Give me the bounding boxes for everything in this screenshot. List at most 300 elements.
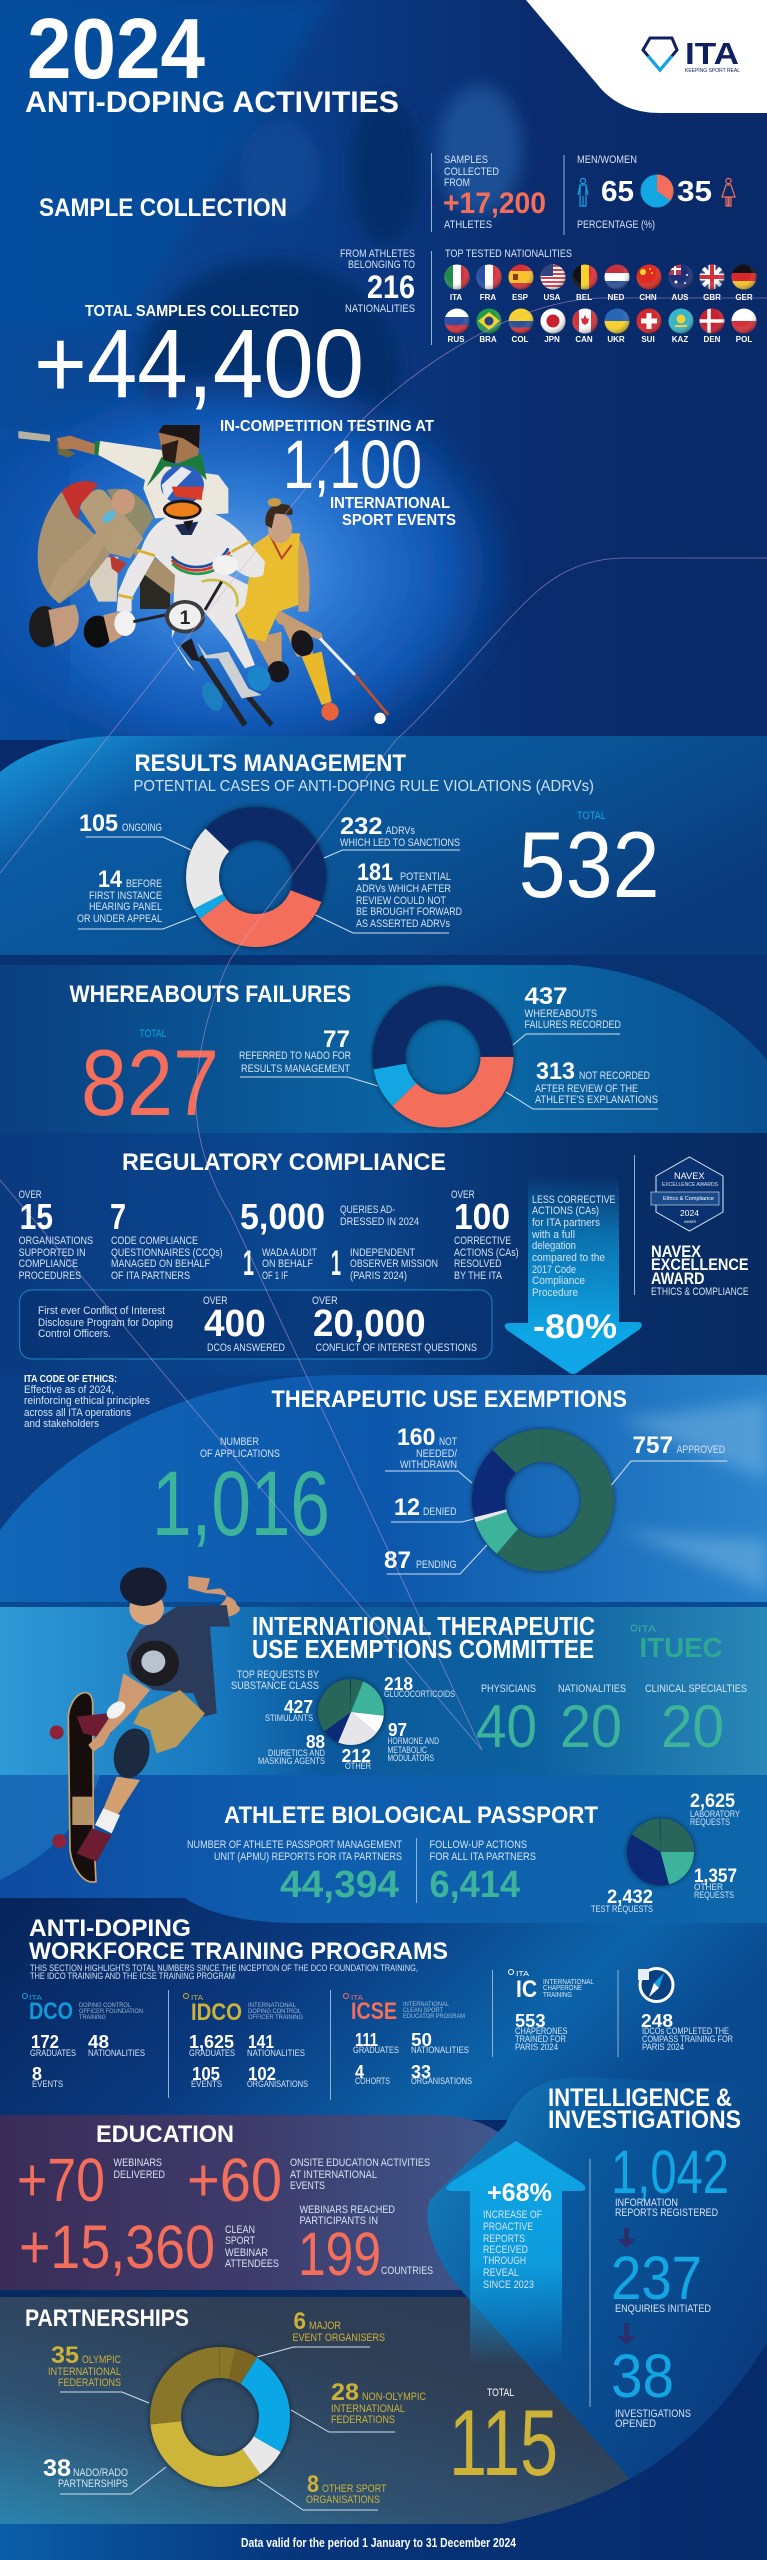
callout: 757 approved: 757 [632, 1432, 673, 1459]
stat: athletes: +17,200 [443, 187, 546, 220]
panel: results management [0, 736, 767, 965]
icon: NAVEX badge: EXCELLENCE AWARDS [662, 1182, 719, 1188]
callout: 181 potential: 181 [357, 859, 393, 886]
stat: men and women: MEN/WOMEN [577, 154, 637, 166]
stat: over 100 corrective actions: RESOLVED [454, 1258, 502, 1270]
panel: conflict of interest disclosure: CONFLICT OF INTEREST QUESTIONS [316, 1342, 477, 1354]
stat: 1,042 information reports [611, 2138, 729, 2219]
callout: 35 olympic federations [48, 2342, 149, 2403]
flags: top tested nationalities: TOP TESTED NATIONALITIES [445, 248, 572, 260]
text: top requests heading [231, 1669, 320, 1692]
program: compass training: COMPASS TRAINING FOR [642, 2034, 733, 2044]
stat: 1,042 information reports: REPORTS REGISTERED [615, 2207, 718, 2219]
callout: 160 not needed [385, 1424, 472, 1483]
program: IDCO: DOPING CONTROL [248, 2008, 301, 2015]
flags: top tested nationalities: USA [544, 293, 561, 302]
flags: top tested nationalities: FRA [480, 293, 496, 302]
icon: NAVEX badge: 2024 [680, 1209, 700, 1218]
callout: 181 potential [316, 859, 462, 933]
flags: top tested nationalities: NED [608, 293, 625, 302]
stat: APMU reports: NUMBER OF ATHLETE PASSPORT MANAGEMENT [187, 1839, 402, 1851]
heading: international therapeutic use exemptions committee: USE EXEMPTIONS COMMITTEE [252, 1634, 594, 1664]
callout: 181 potential: BE BROUGHT FORWARD [356, 906, 462, 918]
stat: 38 investigations: INVESTIGATIONS [615, 2408, 691, 2420]
stat: nationalities: 216 [367, 269, 415, 305]
logo: ITA: KEEPING SPORT REAL [685, 68, 740, 74]
panel: athlete biological passport [0, 1775, 767, 1930]
stat: in-competition events: SPORT EVENTS [342, 512, 456, 529]
labels: substance classes: STIMULANTS [265, 1713, 313, 1723]
athlete: BMX rider: 1 [180, 608, 191, 629]
stat: 38 investigations: OPENED [615, 2418, 656, 2430]
program: DCO [22, 1994, 145, 2089]
heading: international therapeutic use exemptions committee: INTERNATIONAL THERAPEUTIC [252, 1611, 595, 1641]
program: ICSE: ITA [351, 1995, 363, 2002]
callout: 160 not needed: NEEDED/ [416, 1448, 458, 1460]
callout: 181 potential: AS ASSERTED ADRVs [356, 918, 450, 930]
stat: observer mission: 1 [331, 1244, 341, 1283]
flags: top tested nationalities: GER [735, 293, 753, 302]
heading: workforce training: WORKFORCE TRAINING PROGRAMS [29, 1938, 448, 1965]
flags: top tested nationalities: JPN [544, 335, 560, 344]
stat: over 100 corrective actions: BY THE ITA [454, 1270, 503, 1282]
arrow: plus 68 percent: INCREASE OF [483, 2209, 542, 2221]
callout: 6 major event organisers: EVENT ORGANISERS [292, 2332, 385, 2344]
callout: 232 ADRVs [324, 813, 460, 858]
flags: top tested nationalities: RUS [448, 335, 465, 344]
program: ICSE: CLEAN SPORT [403, 2007, 443, 2014]
callout: 160 not needed: 160 [397, 1424, 435, 1451]
program: IC chaperone: PARIS 2024 [515, 2042, 558, 2052]
callout: 181 potential: REVIEW COULD NOT [356, 895, 446, 907]
stat: +15,360 attendees: CLEAN [225, 2224, 255, 2236]
stat: +15,360 attendees: SPORT [225, 2235, 255, 2247]
stat: 38 investigations: 38 [611, 2342, 674, 2410]
program: DCO: NATIONALITIES [88, 2048, 145, 2058]
stat: men and women: PERCENTAGE (%) [577, 219, 655, 231]
heading: workforce training: THE IDCO TRAINING AND THE ICSE TRAINING PROGRAM [30, 1971, 235, 1981]
callout: 77 referred [239, 1026, 378, 1086]
stat: 7 questionnaires: 7 [110, 1196, 126, 1237]
callout: 35 olympic federations: 35 [51, 2342, 79, 2369]
stat: over 100 corrective actions: ACTIONS (CAs) [454, 1247, 519, 1259]
stat: APMU reports: 44,394 [280, 1864, 399, 1906]
stat: 1,016 applications: OF APPLICATIONS [200, 1448, 280, 1460]
total: 827: TOTAL [139, 1028, 166, 1040]
logo: ITUEC: ITUEC [640, 1632, 722, 1663]
arrow: minus 80 percent: LESS CORRECTIVE [532, 1194, 616, 1206]
stat: nationalities: 20 [560, 1693, 622, 1760]
callout: 105 ongoing: ONGOING [122, 822, 162, 834]
labels: follow-up pie: REQUESTS [690, 1817, 730, 1827]
callout: 757 approved: APPROVED [677, 1444, 725, 1456]
arrow: minus 80 percent: for ITA partners [532, 1217, 600, 1229]
stat: over 15: 15 [20, 1196, 53, 1237]
icon: compass [638, 1968, 673, 2002]
arrow: minus 80 percent [505, 1175, 642, 1374]
heading: partnerships: PARTNERSHIPS [25, 2305, 189, 2332]
program: IC chaperone: TRAINED FOR [515, 2034, 566, 2044]
callout: 77 referred: RESULTS MANAGEMENT [241, 1063, 350, 1075]
logo: ITUEC: ITA [638, 1624, 656, 1634]
chart: substance class pie [334, 1696, 368, 1728]
labels: substance classes: GLUCOCORTICOIDS [384, 1689, 455, 1699]
callout: 14 before first instance [77, 866, 196, 929]
white logo corner [526, 0, 767, 113]
stat: 7 questionnaires: CODE COMPLIANCE [111, 1235, 198, 1247]
heading: intelligence and investigations: INVESTIGATIONS [548, 2106, 741, 2134]
heading: regulatory compliance: REGULATORY COMPLIANCE [122, 1149, 446, 1176]
flags: top tested nationalities: BRA [479, 335, 497, 344]
program: DCO: 8 [32, 2064, 42, 2084]
title: ANTI-DOPING ACTIVITIES [25, 86, 399, 119]
program: IDCO: 105 [192, 2064, 220, 2084]
labels: substance classes: 97 [388, 1720, 407, 1740]
callout: 35 olympic federations: FEDERATIONS [58, 2377, 121, 2389]
panel: therapeutic use exemptions [0, 1374, 767, 1610]
program: DCO: DCO [29, 1998, 73, 2025]
athletes collage [18, 425, 388, 725]
program: ICSE: ORGANISATIONS [411, 2076, 472, 2086]
program: DCO: 172 [31, 2032, 59, 2052]
award: NAVEX excellence [651, 1242, 748, 1298]
total: 115: TOTAL [487, 2387, 514, 2399]
stat: over 15 [19, 1189, 93, 1282]
panel: conflict of interest disclosure: Control Officers. [38, 1328, 111, 1340]
callout: 12 denied: DENIED [423, 1506, 457, 1518]
stat: follow-up actions [430, 1839, 536, 1906]
program: ICSE: 50 [411, 2030, 432, 2050]
labels: follow-up pie: LABORATORY [690, 1809, 740, 1819]
heading: workforce training: ANTI-DOPING [29, 1915, 191, 1942]
callout: 87 pending [384, 1545, 487, 1574]
arrow: plus 68 percent: PROACTIVE [483, 2221, 533, 2233]
chart: gender pie [640, 174, 674, 208]
callout: 437 recorded: 437 [524, 983, 568, 1010]
stat: over 100 corrective actions: OVER [451, 1189, 475, 1201]
program: IDCO: IDCO [191, 1999, 242, 2026]
panel: conflict of interest disclosure: DCOs ANSWERED [207, 1342, 285, 1354]
total: 532: TOTAL [577, 810, 606, 822]
footer [0, 2343, 767, 2560]
program: compass training: IDCOs COMPLETED THE [642, 2026, 729, 2036]
program: ICSE: 111 [355, 2030, 378, 2050]
callout: 8 other sport organisations: 8 [307, 2471, 319, 2498]
program: IDCO: 1,625 [189, 2032, 234, 2052]
stat: clinical specialties: CLINICAL SPECIALTIES [645, 1683, 747, 1695]
athlete: hockey player [237, 498, 388, 724]
program: DCO: EVENTS [32, 2079, 63, 2089]
program: ICSE: EDUCATOR PROGRAM [403, 2013, 465, 2020]
callout: 28 non-olympic federations: FEDERATIONS [331, 2414, 395, 2426]
stat: WADA audit [243, 1244, 317, 1283]
stat: +70 webinars: +70 [17, 2146, 105, 2214]
callout: 87 pending: 87 [384, 1547, 411, 1574]
program: IC chaperone [508, 1970, 594, 2052]
callout: 38 NADO/RADO partnerships [43, 2455, 166, 2494]
labels: substance classes: MODULATORS [388, 1753, 434, 1763]
labels: substance classes [258, 1674, 455, 1771]
labels: substance classes: DIURETICS AND [268, 1748, 325, 1758]
callout: 38 NADO/RADO partnerships: NADO/RADO [73, 2467, 128, 2479]
labels: follow-up pie: 2,625 [690, 1791, 735, 1812]
flags: top tested nationalities: GBR [703, 293, 721, 302]
stat: observer mission: INDEPENDENT [350, 1247, 415, 1259]
stat: 199 countries: WEBINARS REACHED [300, 2204, 395, 2216]
labels: substance classes: 212 [342, 1746, 371, 1766]
athlete: shooter [18, 425, 228, 518]
callout: 181 potential: POTENTIAL [400, 871, 451, 883]
text: ITA code of ethics: reinforcing ethical principles [24, 1395, 150, 1407]
chart: follow-up pie [644, 1835, 677, 1869]
callout: 105 ongoing [79, 810, 191, 850]
callout: 757 approved [612, 1432, 728, 1485]
arrow: minus 80 percent: ACTIONS (CAs) [532, 1205, 599, 1217]
program: compass training: 248 [641, 2011, 673, 2031]
stat: in-competition events: 1,100 [283, 426, 422, 503]
heading: whereabouts failures: WHEREABOUTS FAILURES [70, 981, 351, 1008]
panel: international TUE committee [0, 1602, 767, 1779]
stat: +70 webinars: DELIVERED [114, 2169, 165, 2181]
panel: whereabouts failures [0, 955, 767, 1135]
stat: follow-up actions: FOR ALL ITA PARTNERS [430, 1851, 536, 1863]
stat: 7 questionnaires: OF ITA PARTNERS [111, 1270, 190, 1282]
flags: top tested nationalities: ITA [450, 293, 462, 302]
stat: over 15: OVER [19, 1189, 42, 1201]
stat: 1,042 information reports: INFORMATION [615, 2197, 678, 2209]
heading: results management: RESULTS MANAGEMENT [134, 750, 406, 777]
labels: follow-up pie: REQUESTS [694, 1890, 734, 1900]
stat: men and women: 35 [677, 176, 712, 208]
stat: athletes [443, 154, 546, 231]
stat: 7 questionnaires [110, 1196, 223, 1282]
text: ITA code of ethics: Effective as of 2024, [24, 1384, 114, 1396]
callout: 313 not recorded: ATHLETE'S EXPLANATIONS [535, 1094, 658, 1106]
callout: 181 potential: ADRVs WHICH AFTER [356, 883, 451, 895]
callout: 77 referred: 77 [323, 1026, 350, 1053]
program: ICSE: INTERNATIONAL [403, 2001, 449, 2008]
labels: follow-up pie: TEST REQUESTS [591, 1904, 653, 1914]
arrow: minus 80 percent: Procedure [532, 1287, 578, 1299]
callout: 12 denied [391, 1494, 474, 1522]
stat: over 15: PROCEDURES [19, 1270, 81, 1282]
stat: 5,000 queries: DRESSED IN 2024 [340, 1216, 419, 1228]
stat: men and women: 65 [601, 176, 634, 208]
program: IC chaperone: 553 [515, 2011, 546, 2031]
stat: in-competition events: IN-COMPETITION TESTING AT [220, 418, 434, 435]
callout: 28 non-olympic federations: INTERNATIONAL [331, 2403, 405, 2415]
logo: ITA: ITA [685, 36, 739, 71]
stat: 1,016 applications [152, 1436, 330, 1555]
program: IC chaperone: CHAPERONE [543, 1985, 582, 1992]
panel: conflict of interest disclosure: First ever Conflict of Interest [38, 1305, 165, 1317]
athlete: diver [29, 481, 183, 648]
program: IDCO: OFFICER TRAINING [248, 2014, 303, 2021]
program: IDCO: GRADUATES [189, 2048, 235, 2058]
callout: 232 ADRVs: ADRVs [386, 825, 415, 837]
stat: 199 countries: COUNTRIES [381, 2265, 433, 2277]
athlete: skateboarder [50, 1567, 240, 1882]
labels: substance classes: HORMONE AND [388, 1736, 439, 1746]
stat: 199 countries: 199 [298, 2220, 381, 2288]
chart: partnerships donut [166, 2362, 274, 2472]
stat: APMU reports [187, 1839, 402, 1906]
program: DCO: GRADUATES [30, 2048, 76, 2058]
stat: 5,000 queries [240, 1196, 419, 1237]
stat: over 100 corrective actions: CORRECTIVE [454, 1235, 511, 1247]
callout: 160 not needed: NOT [439, 1436, 457, 1448]
flags: top tested nationalities: ESP [512, 293, 529, 302]
stat: physicians: PHYSICIANS [481, 1683, 536, 1695]
stat: physicians: 40 [476, 1693, 537, 1760]
stat: observer mission [331, 1244, 438, 1283]
stat: +60 onsite activities [187, 2146, 430, 2214]
arrow: minus 80 percent: delegation [532, 1240, 576, 1252]
text: ITA code of ethics: across all ITA operations [24, 1407, 131, 1419]
stat: 237 enquiries: 237 [611, 2244, 702, 2312]
program: ICSE: 4 [355, 2062, 364, 2082]
panel: conflict of interest disclosure: OVER [203, 1295, 228, 1307]
stat: clinical specialties [645, 1683, 747, 1760]
stat: 5,000 queries: 5,000 [240, 1196, 325, 1237]
arrow: plus 68 percent: SINCE 2023 [483, 2279, 534, 2291]
panel: sample collection [0, 0, 767, 780]
program: IDCO: 102 [248, 2064, 276, 2084]
stat: observer mission: OBSERVER MISSION [350, 1258, 438, 1270]
callout: 38 NADO/RADO partnerships: PARTNERSHIPS [58, 2478, 128, 2490]
callout: 437 recorded: WHEREABOUTS [524, 1008, 597, 1020]
stat: total samples collected: TOTAL SAMPLES COLLECTED [85, 303, 299, 320]
arrow: down [617, 2228, 636, 2248]
title [25, 2, 399, 119]
stat: +15,360 attendees: +15,360 [19, 2213, 215, 2281]
heading: education: EDUCATION [96, 2121, 234, 2148]
callout: 35 olympic federations: INTERNATIONAL [48, 2366, 121, 2378]
heading: intelligence and investigations [548, 2084, 741, 2134]
program: IDCO: NATIONALITIES [247, 2048, 305, 2058]
stat: nationalities: NATIONALITIES [345, 303, 415, 315]
callout: 8 other sport organisations: ORGANISATIONS [306, 2494, 380, 2506]
stat: nationalities: BELONGING TO [348, 259, 415, 271]
stat: 1,042 information reports: 1,042 [611, 2138, 729, 2206]
stat: 5,000 queries: QUERIES AD- [340, 1204, 395, 1216]
stat: +60 onsite activities: AT INTERNATIONAL [290, 2169, 377, 2181]
panel: education [0, 2115, 520, 2297]
labels: substance classes: MASKING AGENTS [258, 1756, 325, 1766]
arrow: plus 68 percent [446, 2141, 586, 2365]
program: IC chaperone: IC [516, 1976, 537, 2003]
stat: +15,360 attendees: WEBINAR [225, 2247, 268, 2259]
callout: 6 major event organisers [257, 2308, 385, 2357]
program: IC chaperone: ITA [516, 1971, 529, 1978]
program: compass training: PARIS 2024 [642, 2042, 684, 2052]
callout: 313 not recorded: AFTER REVIEW OF THE [535, 1083, 638, 1095]
program: compass training [638, 1968, 733, 2052]
flags: top tested nationalities: UKR [607, 335, 625, 344]
stat: APMU reports: UNIT (APMU) REPORTS FOR ITA PARTNERS [214, 1851, 402, 1863]
callout: 14 before first instance: BEFORE [126, 878, 162, 890]
stat: 7 questionnaires: MANAGED ON BEHALF [111, 1258, 210, 1270]
stat: 1,016 applications: NUMBER [220, 1436, 259, 1448]
program: IDCO: 141 [248, 2032, 274, 2052]
flags: top tested nationalities: CAN [575, 335, 593, 344]
callout: 232 ADRVs: WHICH LED TO SANCTIONS [340, 837, 460, 849]
flags: top tested nationalities: BEL [576, 293, 592, 302]
title: 2024 [27, 2, 205, 97]
panel: intelligence and investigations [427, 2077, 767, 2490]
chart: whereabouts donut [389, 1003, 497, 1111]
text: ITA code of ethics: ITA CODE OF ETHICS: [24, 1374, 117, 1385]
callout: 160 not needed: WITHDRAWN [400, 1459, 457, 1471]
total: 115: 115 [449, 2390, 558, 2495]
callout: 105 ongoing: 105 [79, 810, 118, 837]
stat: over 15: COMPLIANCE [19, 1258, 78, 1270]
chart: TUE donut [488, 1446, 598, 1554]
icon: NAVEX badge: WINNER [684, 1219, 696, 1224]
text: top requests heading: TOP REQUESTS BY [237, 1669, 320, 1681]
stat: in-competition events [220, 418, 456, 529]
icon: NAVEX badge [651, 1157, 723, 1231]
callout: 313 not recorded: 313 [536, 1058, 575, 1085]
stat: 199 countries: PARTICIPANTS IN [300, 2215, 378, 2227]
callout: 38 NADO/RADO partnerships: 38 [43, 2455, 71, 2482]
panel: conflict of interest disclosure [20, 1290, 492, 1359]
stat: +60 onsite activities: EVENTS [290, 2180, 325, 2192]
panel: conflict of interest disclosure: 20,000 [313, 1303, 426, 1345]
flags: top tested nationalities: DEN [704, 335, 721, 344]
flags: top tested nationalities: CHN [639, 293, 657, 302]
flags: top tested nationalities: SUI [641, 335, 655, 344]
award: NAVEX excellence: AWARD [651, 1269, 704, 1288]
stat: WADA audit: OF 1 IF [262, 1270, 288, 1282]
labels: substance classes: 427 [284, 1697, 313, 1717]
stat: +70 webinars: WEBINARS [114, 2157, 162, 2169]
program: IC chaperone: INTERNATIONAL [543, 1979, 594, 1986]
chart: ADRV donut [202, 824, 310, 930]
callout: 35 olympic federations: OLYMPIC [82, 2354, 121, 2366]
stat: athletes: SAMPLES [444, 154, 488, 166]
labels: follow-up pie: OTHER [694, 1882, 723, 1892]
total: 532: 532 [519, 812, 660, 917]
callout: 6 major event organisers: MAJOR [309, 2320, 341, 2332]
stat: 1,016 applications: 1,016 [152, 1453, 330, 1555]
stat: athletes: COLLECTED [444, 166, 499, 178]
stat: over 100 corrective actions [451, 1189, 519, 1282]
program: ICSE: ICSE [351, 1998, 397, 2025]
callout: 313 not recorded [506, 1058, 658, 1109]
program: DCO: OFFICER FOUNDATION [79, 2008, 143, 2015]
flags: top tested nationalities: COL [512, 335, 529, 344]
callout: 28 non-olympic federations: 28 [331, 2379, 359, 2406]
program: IC chaperone: TRAINING [543, 1992, 572, 1999]
callout: 14 before first instance: 14 [98, 866, 123, 893]
program: ICSE: NATIONALITIES [411, 2045, 469, 2055]
stat: 38 investigations [611, 2342, 691, 2430]
arrow: plus 68 percent: THROUGH [483, 2255, 526, 2267]
callout: 12 denied: 12 [394, 1494, 420, 1521]
flags: top tested nationalities [444, 248, 757, 344]
panel: regulatory compliance [0, 1133, 767, 1545]
program: ICSE: GRADUATES [353, 2045, 399, 2055]
flags: top tested nationalities: AUS [672, 293, 689, 302]
arrow: plus 68 percent: RECEIVED [483, 2244, 528, 2256]
labels: follow-up pie [591, 1791, 740, 1914]
heading: workforce training [29, 1915, 448, 1981]
total: 827: 827 [81, 1030, 219, 1135]
stat: observer mission: (PARIS 2024) [350, 1270, 407, 1282]
stat: +60 onsite activities: +60 [187, 2146, 282, 2214]
stat: in-competition events: INTERNATIONAL [330, 495, 450, 512]
